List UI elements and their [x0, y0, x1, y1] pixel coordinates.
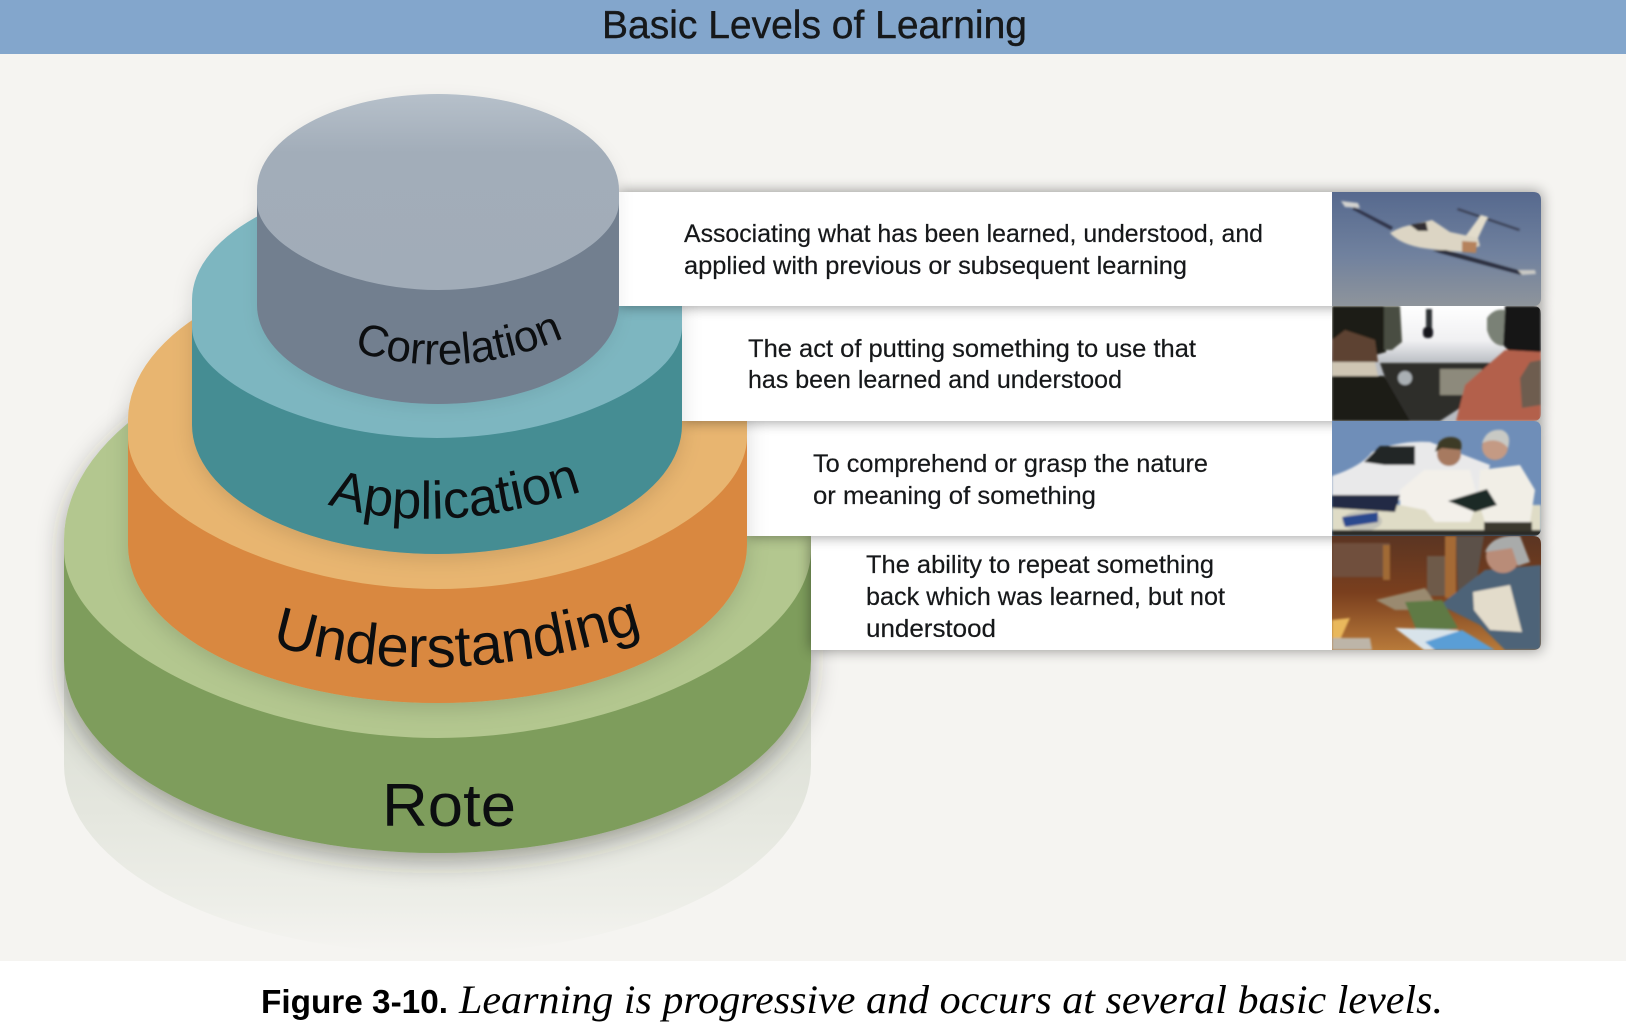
label: Rote: Rote [382, 772, 516, 839]
label: Correlation: Correlation [359, 319, 562, 365]
panel: understanding description: To comprehend or grasp the nature [813, 450, 1208, 478]
tier: Rote [64, 331, 811, 853]
photo: man studying at a table [1332, 536, 1541, 650]
panel: rote description: The ability to repeat something [866, 551, 1214, 579]
panel: application description: has been learned and understood [748, 366, 1122, 394]
panel: rote description [811, 536, 1541, 650]
panel: rote description: understood [866, 615, 996, 643]
label: Understanding: Understanding [278, 604, 640, 668]
panel: correlation description [618, 192, 1541, 306]
tier: Application [186, 216, 688, 564]
label: Application: Application [328, 467, 579, 529]
title banner: Basic Levels of Learning [602, 4, 1027, 47]
panel: application description: The act of putting something to use that [748, 335, 1196, 363]
tier: Understanding [122, 318, 754, 715]
photo: cockpit with two pilots [1332, 306, 1541, 421]
panel: understanding description: or meaning of something [813, 482, 1096, 510]
caption: Figure 3-10. [261, 983, 448, 1020]
title banner [0, 0, 1626, 54]
panel: correlation description: applied with previous or subsequent learning [684, 252, 1187, 280]
panel: application description [682, 306, 1541, 421]
tier: Correlation [256, 94, 620, 405]
panel: understanding description [747, 421, 1541, 536]
floor reflection [64, 620, 811, 953]
photo: instructor and student by aircraft [1332, 421, 1541, 536]
caption: Learning is progressive and occurs at several basic levels. [458, 977, 1443, 1022]
panel: rote description: back which was learned, but not [866, 583, 1225, 611]
panel: correlation description: Associating what has been learned, understood, and [684, 220, 1263, 248]
photo: aircraft in flight [1332, 192, 1541, 306]
